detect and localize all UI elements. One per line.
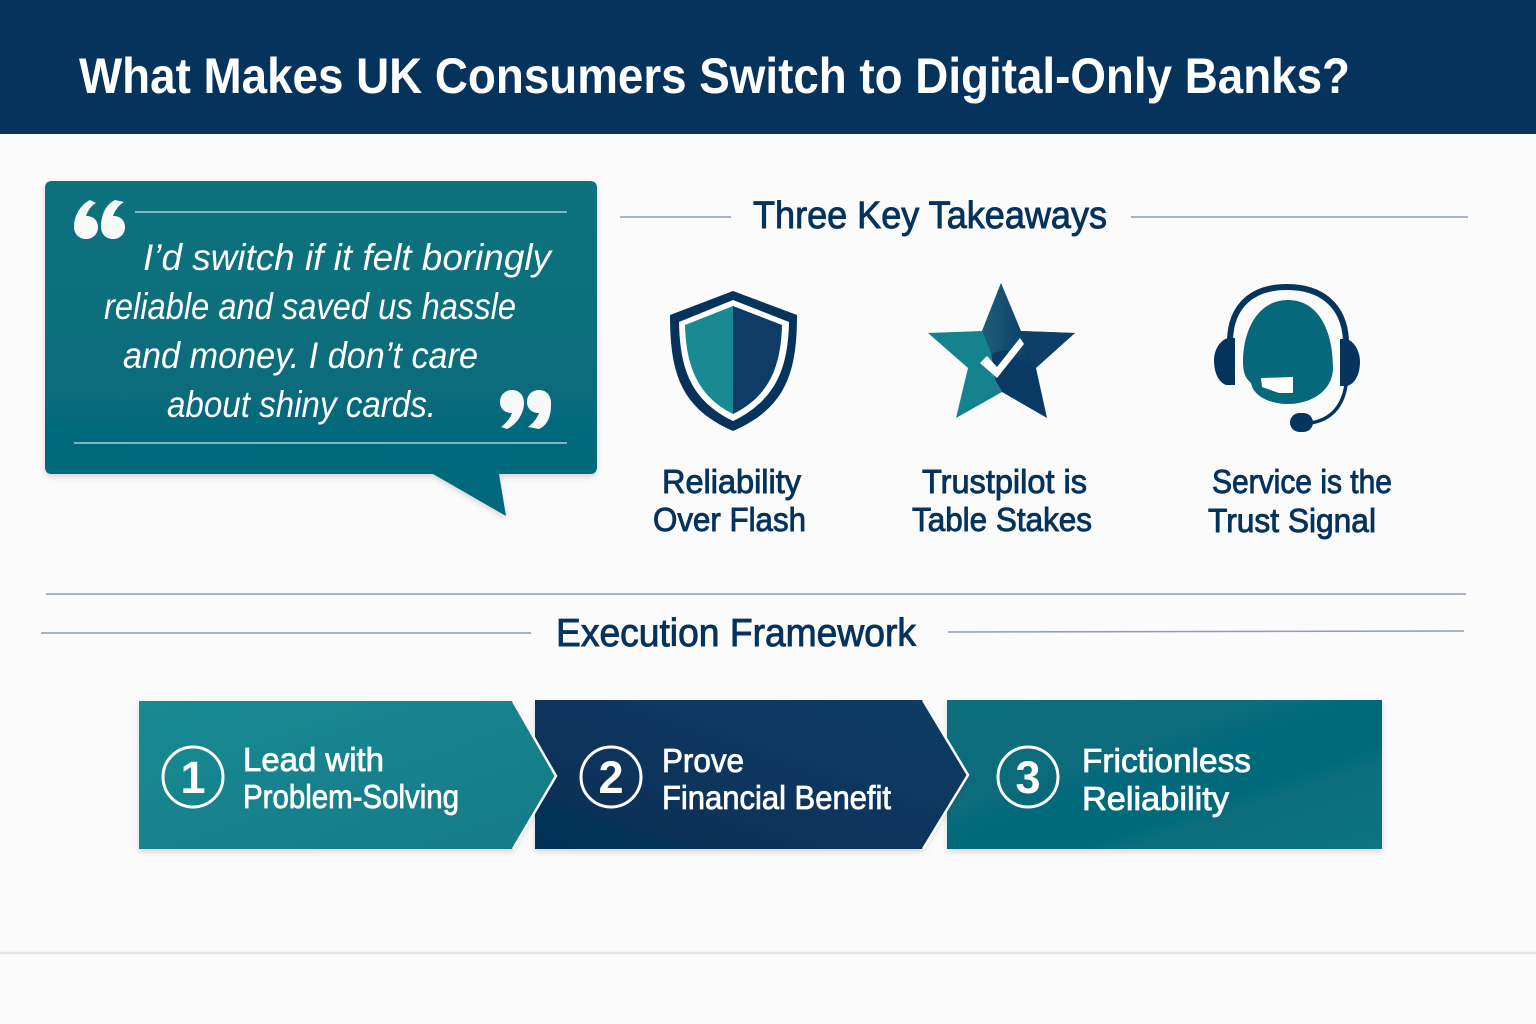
step 3: Frictionless Reliability: Reliability bbox=[1082, 780, 1230, 817]
quote text: reliable and saved us hassle bbox=[104, 286, 516, 327]
panel: quote speech bubble bbox=[45, 181, 597, 516]
title: What Makes UK Consumers Switch to Digital-Only Banks? bbox=[79, 48, 1350, 104]
step 3: Frictionless Reliability: 3 bbox=[1015, 752, 1041, 803]
takeaway label: Reliability Over Flash bbox=[653, 463, 806, 538]
step 3: Frictionless Reliability bbox=[947, 700, 1382, 849]
header banner bbox=[0, 0, 1536, 134]
step 1: Lead with Problem-Solving bbox=[139, 701, 556, 849]
takeaway label: Reliability Over Flash: Reliability bbox=[662, 463, 801, 500]
takeaway label: Reliability Over Flash: Over Flash bbox=[653, 501, 806, 538]
quote text: and money. I don’t care bbox=[123, 335, 478, 376]
takeaway label: Trustpilot is Table Stakes: Table Stakes bbox=[912, 501, 1092, 538]
takeaway label: Service is the Trust Signal: Service is the bbox=[1212, 463, 1392, 500]
step 1: Lead with Problem-Solving: Problem-Solving bbox=[243, 778, 459, 815]
quote text bbox=[104, 237, 553, 425]
takeaway label: Trustpilot is Table Stakes bbox=[912, 463, 1092, 538]
icon: headset bbox=[1214, 287, 1360, 432]
step 2: Prove Financial Benefit bbox=[535, 700, 968, 849]
step 2: Prove Financial Benefit: 2 bbox=[598, 752, 624, 803]
heading: Execution Framework: Execution Framework bbox=[556, 612, 916, 655]
icon: star with checkmark bbox=[928, 283, 1075, 418]
step 1: Lead with Problem-Solving: 1 bbox=[180, 752, 206, 803]
heading: Three Key Takeaways: Three Key Takeaways bbox=[753, 195, 1107, 237]
quote text: I’d switch if it felt boringly bbox=[143, 237, 553, 278]
icon: closing quote mark bbox=[500, 390, 551, 429]
step 2: Prove Financial Benefit: Prove bbox=[662, 742, 744, 779]
icon: opening quote mark bbox=[74, 200, 125, 239]
step 3: Frictionless Reliability: Frictionless bbox=[1082, 742, 1251, 779]
step 1: Lead with Problem-Solving: Lead with bbox=[243, 741, 384, 778]
icon: shield bbox=[670, 291, 797, 431]
quote text: about shiny cards. bbox=[167, 384, 436, 425]
takeaway label: Trustpilot is Table Stakes: Trustpilot is bbox=[922, 463, 1087, 500]
step 2: Prove Financial Benefit: Financial Benefit bbox=[662, 779, 891, 816]
takeaway label: Service is the Trust Signal: Trust Signal bbox=[1208, 502, 1376, 539]
takeaway label: Service is the Trust Signal bbox=[1208, 463, 1392, 539]
